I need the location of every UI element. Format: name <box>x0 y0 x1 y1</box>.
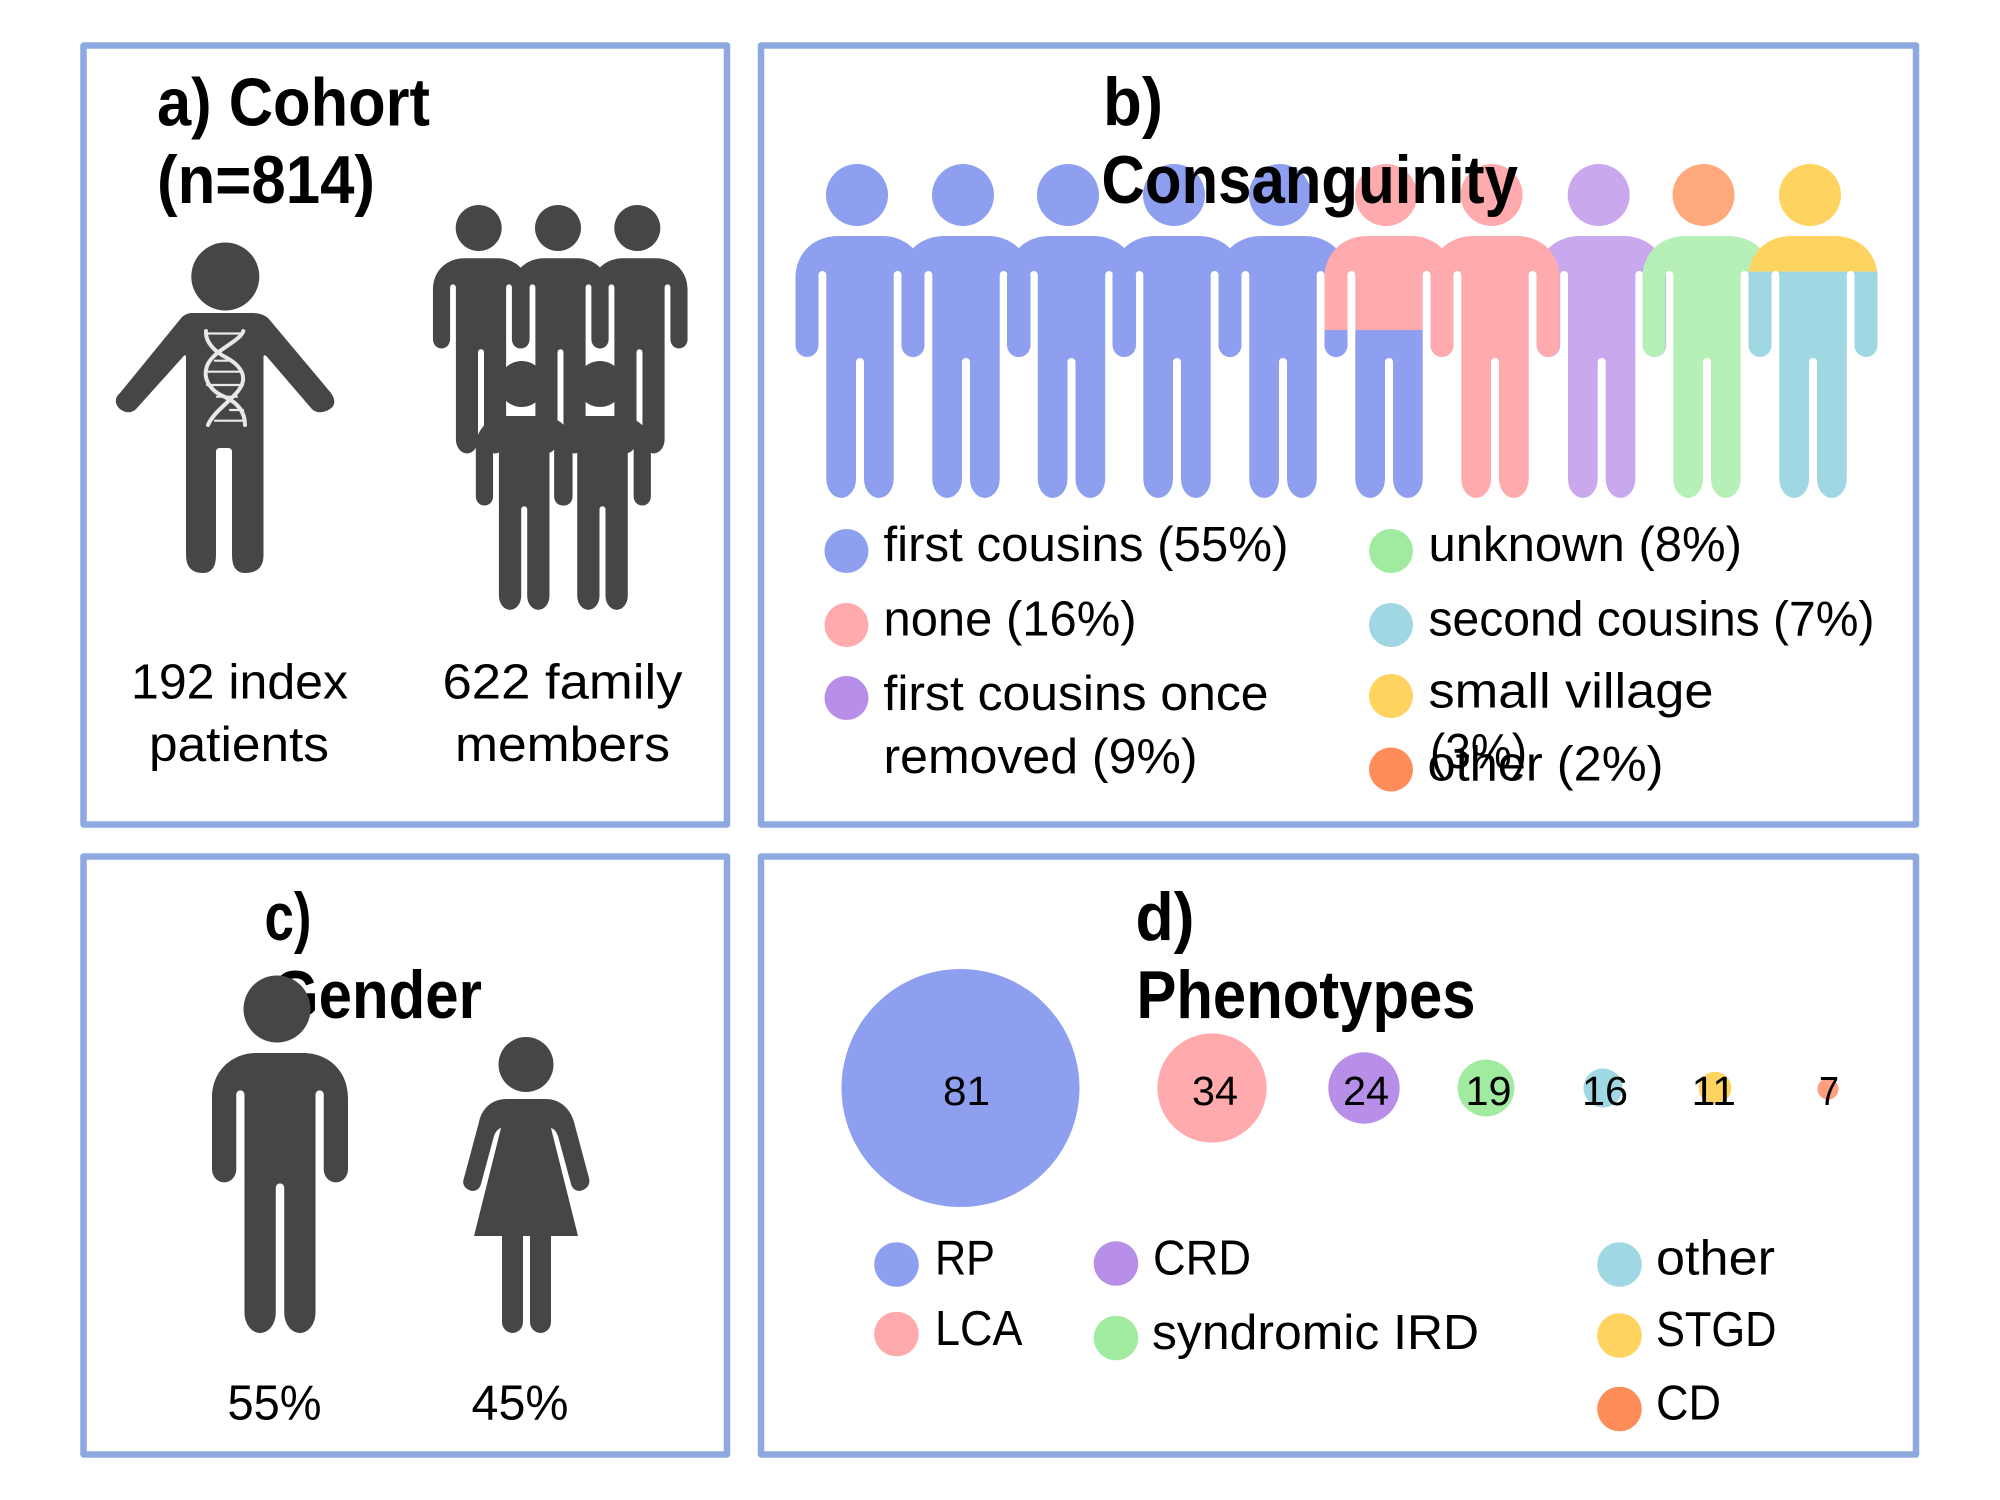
bubble chart: phenotype counts: 81 <box>943 1068 990 1114</box>
legend: phenotype categories: other <box>1656 1232 1775 1286</box>
heading: d) Phenotypes: d) <box>1136 879 1194 955</box>
legend: phenotype categories: CRD <box>1153 1232 1251 1286</box>
legend: consanguinity categories: first cousins once <box>884 667 1268 721</box>
label: 192 index patients <box>131 656 348 772</box>
icon: family members group <box>433 205 688 610</box>
heading: b) Consanguinity: Consanguinity <box>1102 142 1518 218</box>
heading: a) Cohort (n=814): (n=814) <box>157 142 375 218</box>
legend: consanguinity categories: unknown (8%) <box>1428 518 1742 572</box>
legend: phenotype categories: syndromic IRD <box>1152 1306 1479 1360</box>
label: 622 family members: 622 family <box>442 656 683 710</box>
label: 55%: 55% <box>228 1376 322 1430</box>
panel: c) gender <box>84 856 727 1454</box>
icon: woman <box>463 1037 589 1333</box>
legend: consanguinity categories: removed (9%) <box>884 730 1198 784</box>
legend: phenotype categories <box>874 1232 1776 1431</box>
panel: b) consanguinity <box>761 46 1916 824</box>
heading: a) Cohort (n=814) <box>157 64 430 218</box>
heading: c) Gender: Gender <box>272 957 482 1033</box>
legend: phenotype categories: STGD <box>1656 1303 1776 1357</box>
heading: b) Consanguinity: b) <box>1103 64 1163 140</box>
label: 192 index patients: 192 index <box>131 656 348 710</box>
icon: man <box>212 976 348 1333</box>
icon: index patient with DNA <box>116 242 334 573</box>
legend: consanguinity categories: other (2%) <box>1428 738 1664 792</box>
label: 192 index patients: patients <box>149 718 329 772</box>
legend: phenotype categories: CD <box>1656 1376 1721 1430</box>
legend: consanguinity categories: second cousins (7%) <box>1428 592 1874 646</box>
bubble chart: phenotype counts: 16 <box>1582 1068 1628 1114</box>
label: 622 family members <box>442 656 683 772</box>
heading: d) Phenotypes: Phenotypes <box>1136 957 1476 1033</box>
heading: c) Gender: c) <box>264 879 312 955</box>
legend: consanguinity categories: (3%) <box>1430 725 1527 779</box>
legend: consanguinity categories: none (16%) <box>884 592 1136 646</box>
bubble chart: phenotype counts: 24 <box>1343 1068 1389 1114</box>
legend: consanguinity categories: first cousins (55%) <box>884 518 1288 572</box>
legend: consanguinity categories <box>824 518 1874 792</box>
bubble chart: phenotype counts: 19 <box>1466 1068 1512 1114</box>
bubble chart: phenotype counts: 34 <box>1192 1068 1238 1114</box>
bubble chart: phenotype counts <box>842 969 1839 1207</box>
label: 45%: 45% <box>472 1376 568 1430</box>
panel: d) phenotypes <box>761 856 1916 1454</box>
legend: consanguinity categories: small village <box>1428 664 1714 718</box>
heading: d) Phenotypes <box>1136 879 1476 1033</box>
heading: b) Consanguinity <box>1102 64 1518 218</box>
pictogram: ten people row <box>796 164 1878 498</box>
icon: DNA helix <box>206 331 245 425</box>
heading: a) Cohort (n=814): a) Cohort <box>157 64 430 140</box>
legend: phenotype categories: LCA <box>935 1302 1023 1356</box>
legend: phenotype categories: RP <box>935 1232 995 1286</box>
bubble chart: phenotype counts: 11 <box>1692 1068 1736 1114</box>
panel: a) cohort <box>84 46 727 824</box>
bubble chart: phenotype counts: 7 <box>1819 1068 1839 1114</box>
label: 622 family members: members <box>455 718 670 772</box>
heading: c) Gender <box>264 879 482 1033</box>
